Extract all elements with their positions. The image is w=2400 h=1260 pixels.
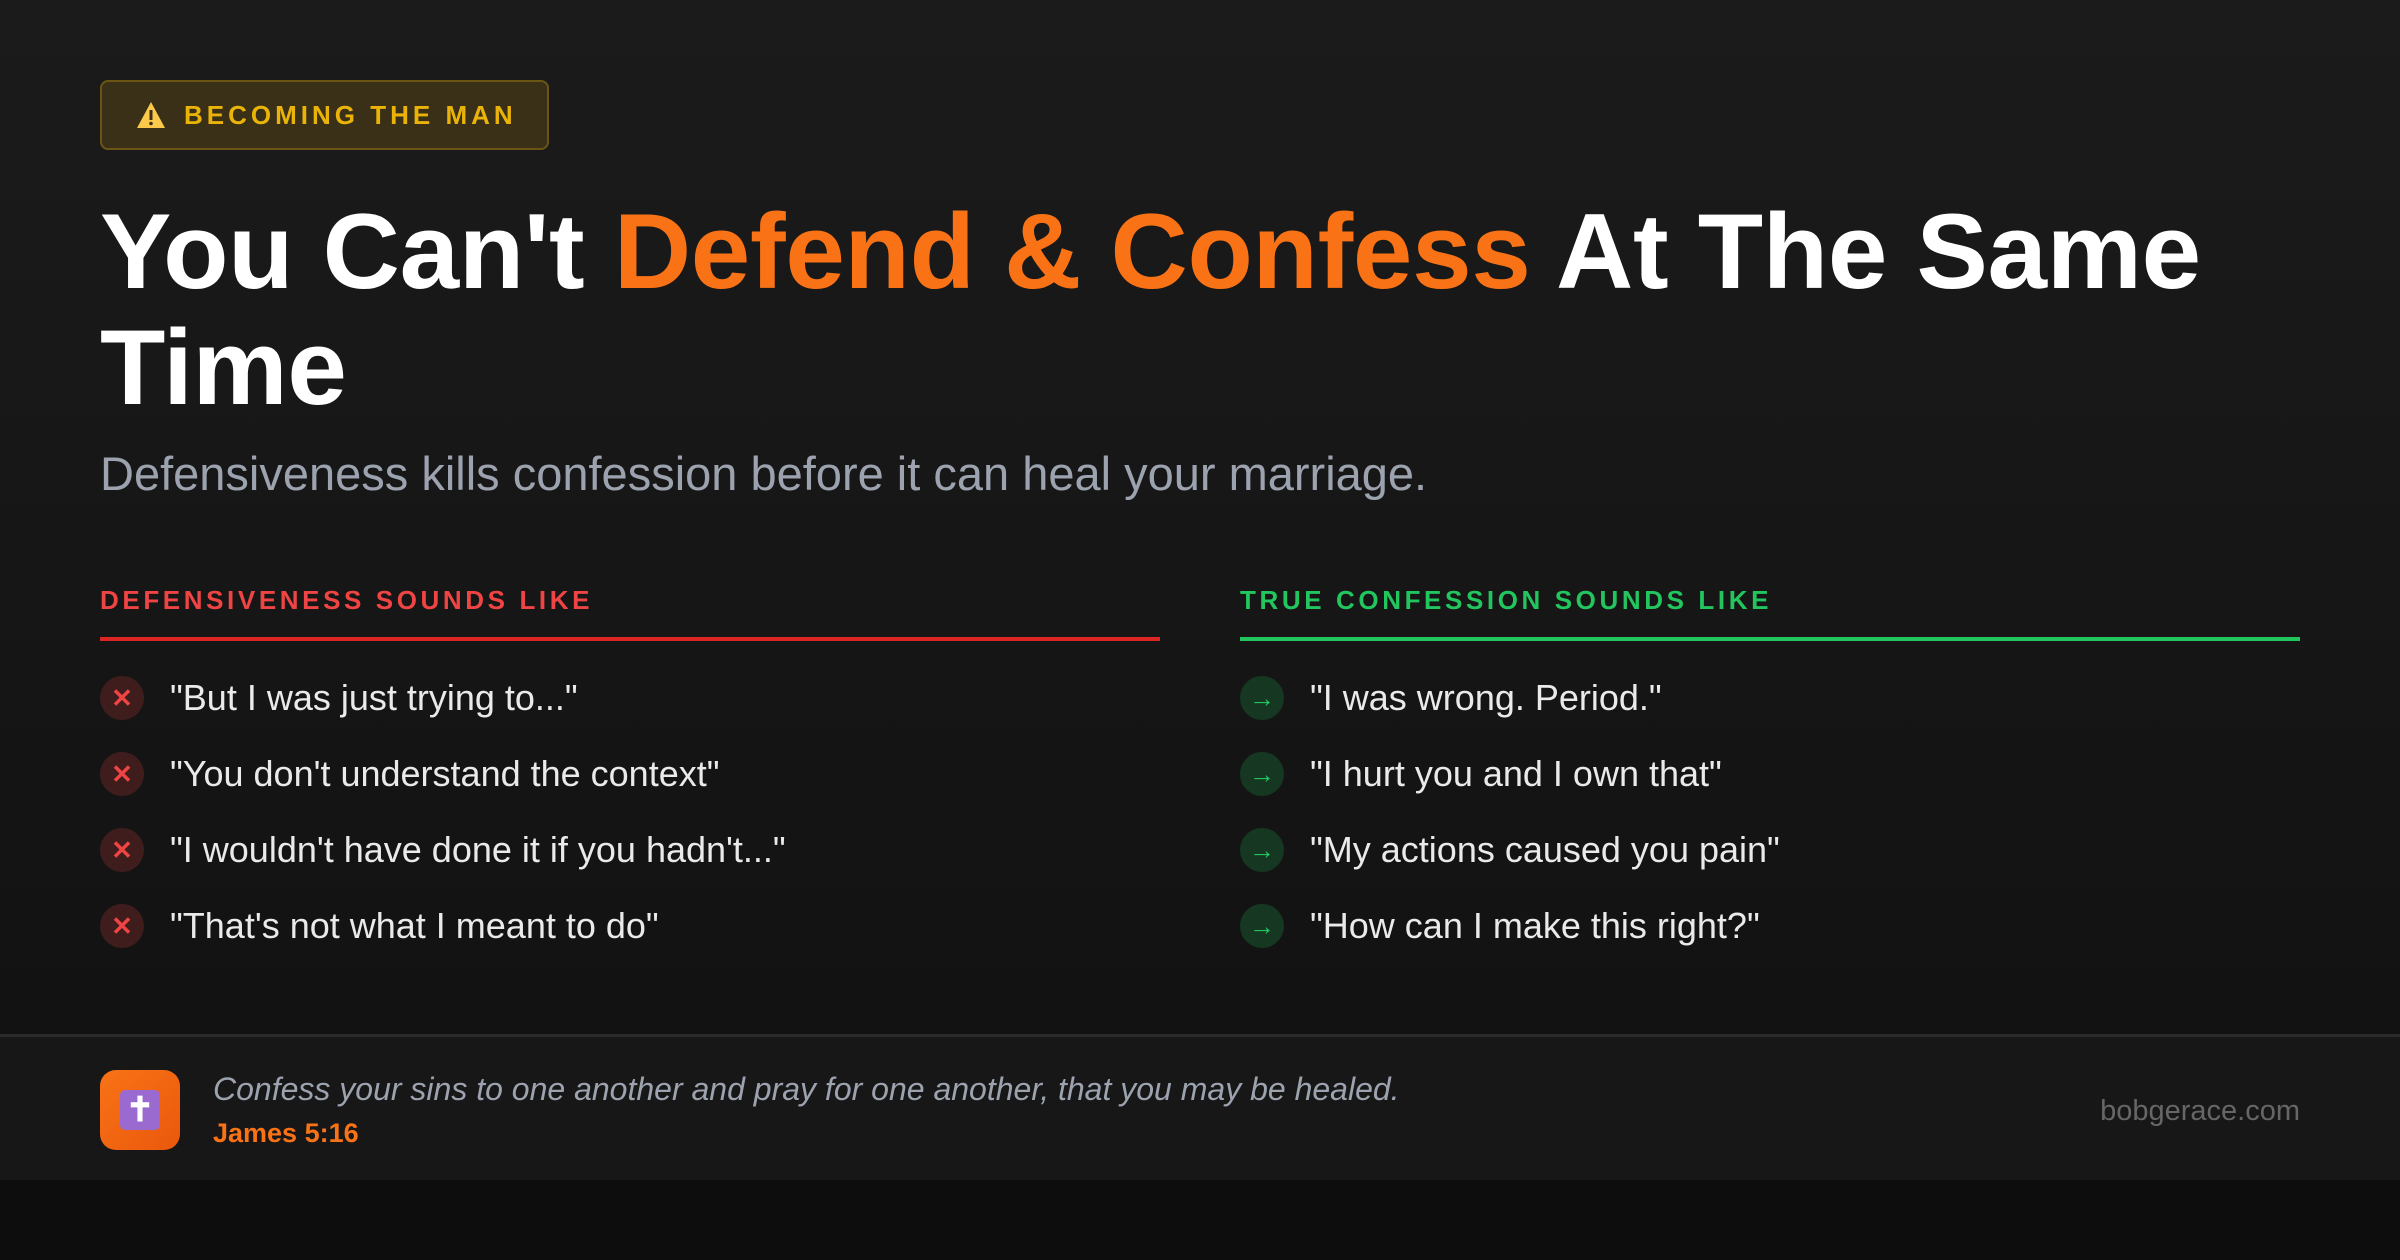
heading: defensiveness: [100, 585, 1160, 641]
reference: James 5:16: [213, 1118, 359, 1148]
panel: defensiveness: [100, 585, 1160, 948]
item: ✕: [111, 682, 133, 712]
item: →: [1249, 682, 1275, 712]
item: →: [1249, 910, 1275, 940]
item: "How can I make this right?": [1310, 905, 1760, 946]
subtitle: Defensiveness kills confession before it can heal your marriage.: [100, 447, 1427, 500]
heading: confession: TRUE CONFESSION SOUNDS LIKE: [1240, 585, 1772, 615]
item: "I was wrong. Period.": [1310, 677, 1662, 718]
badge: [100, 80, 549, 150]
item: "But I was just trying to...": [170, 677, 578, 718]
heading: confession: [1240, 585, 2300, 641]
item: ✕: [111, 758, 133, 788]
item: "You don't understand the context": [170, 753, 720, 794]
item: ✕: [111, 910, 133, 940]
quote: Confess your sins to one another and pray for one another, that you may be healed.: [213, 1071, 1400, 1107]
icon: cross: ✝: [126, 1091, 154, 1129]
panel: confession: [1240, 585, 2300, 948]
item: "I wouldn't have done it if you hadn't...": [170, 829, 786, 870]
title: You Can't Defend & Confess At The Same Time: [100, 191, 2201, 427]
item: ✕: [111, 834, 133, 864]
item: "That's not what I meant to do": [170, 905, 659, 946]
item: "I hurt you and I own that": [1310, 753, 1722, 794]
footer: [0, 1034, 2400, 1180]
heading: defensiveness: DEFENSIVENESS SOUNDS LIKE: [100, 585, 593, 615]
badge: BECOMING THE MAN: [184, 100, 517, 130]
item: "My actions caused you pain": [1310, 829, 1780, 870]
item: →: [1249, 834, 1275, 864]
icon: cross: [100, 1070, 180, 1150]
website: bobgerace.com: [2100, 1095, 2300, 1127]
item: →: [1249, 758, 1275, 788]
